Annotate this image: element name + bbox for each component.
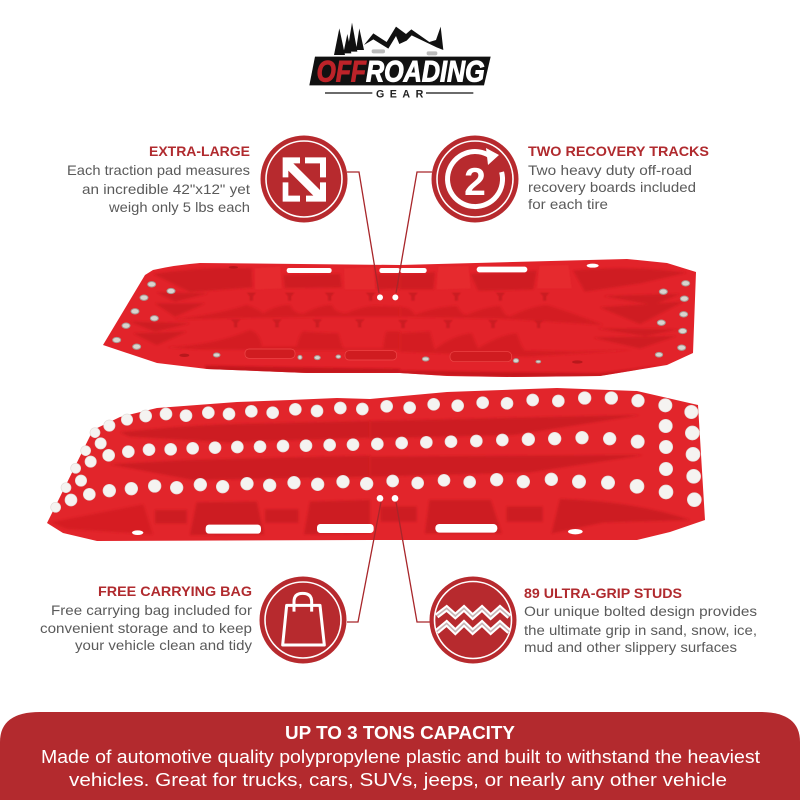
callout: ultra-grip studs: mud and other slippery surfaces xyxy=(524,639,737,655)
callout: two recovery tracks xyxy=(528,143,709,212)
white holes xyxy=(377,294,383,300)
right half details xyxy=(398,264,690,364)
shaded relief xyxy=(51,415,690,535)
board body xyxy=(103,259,696,377)
callout: free carrying bag: FREE CARRYING BAG xyxy=(98,583,252,599)
logo word OFF: OFF xyxy=(317,55,367,88)
logo word ROADING: ROADING xyxy=(366,55,485,88)
callout: two recovery tracks: TWO RECOVERY TRACKS xyxy=(528,143,709,159)
banner text: vehicles. Great for trucks, cars, SUVs, jeeps, or nearly any other vehicle xyxy=(69,770,727,790)
callout: two recovery tracks: for each tire xyxy=(528,196,608,212)
track 2: studded, bottom board xyxy=(47,388,705,541)
callout: free carrying bag xyxy=(40,583,252,653)
callout: extra-large: weigh only 5 lbs each xyxy=(108,199,250,215)
banner text xyxy=(41,747,760,790)
icon: grip waves xyxy=(430,576,516,664)
shaded relief xyxy=(130,268,687,377)
icon: two recovery tracks xyxy=(432,136,518,222)
icon: extra-large arrows xyxy=(260,136,348,222)
callout: ultra-grip studs: the ultimate grip in sand, snow, ice, xyxy=(524,622,757,638)
logo xyxy=(309,23,491,101)
callout: free carrying bag: convenient storage and to keep xyxy=(40,620,252,636)
icon: carrying bag xyxy=(260,576,346,664)
banner: capacity xyxy=(0,712,800,800)
callout: extra-large xyxy=(67,143,250,215)
track 1: underside, top board xyxy=(103,259,696,377)
icon: two recovery tracks: 2 xyxy=(464,161,486,204)
callout: two recovery tracks: Two heavy duty off-road xyxy=(528,162,692,178)
callout: extra-large: Each traction pad measures xyxy=(67,162,250,178)
right half details xyxy=(371,392,701,534)
callout: ultra-grip studs: 89 ULTRA-GRIP STUDS xyxy=(524,585,682,601)
studs xyxy=(51,402,373,512)
callout: free carrying bag: your vehicle clean and tidy xyxy=(75,637,252,653)
left half details xyxy=(51,402,374,535)
left half details xyxy=(113,266,400,360)
callout: ultra-grip studs: Our unique bolted design provides xyxy=(524,603,757,619)
board body xyxy=(47,388,705,541)
studs xyxy=(371,392,701,507)
logo word GEAR: GEAR xyxy=(376,89,424,101)
callout: two recovery tracks: recovery boards included xyxy=(528,179,696,195)
banner heading: UP TO 3 TONS CAPACITY xyxy=(285,723,515,743)
logo mountains and trees xyxy=(334,23,443,55)
callout: ultra-grip studs xyxy=(524,585,757,655)
callout: extra-large: EXTRA-LARGE xyxy=(149,143,250,159)
leader lines xyxy=(347,172,432,622)
callout: extra-large: an incredible 42"x12" yet xyxy=(82,181,250,197)
logo banner xyxy=(309,57,491,85)
metal bolts xyxy=(113,282,341,360)
banner text: Made of automotive quality polypropylene plastic and built to withstand the heaviest xyxy=(41,747,760,767)
cross studs xyxy=(231,293,375,327)
callout: free carrying bag: Free carrying bag included for xyxy=(51,602,252,618)
